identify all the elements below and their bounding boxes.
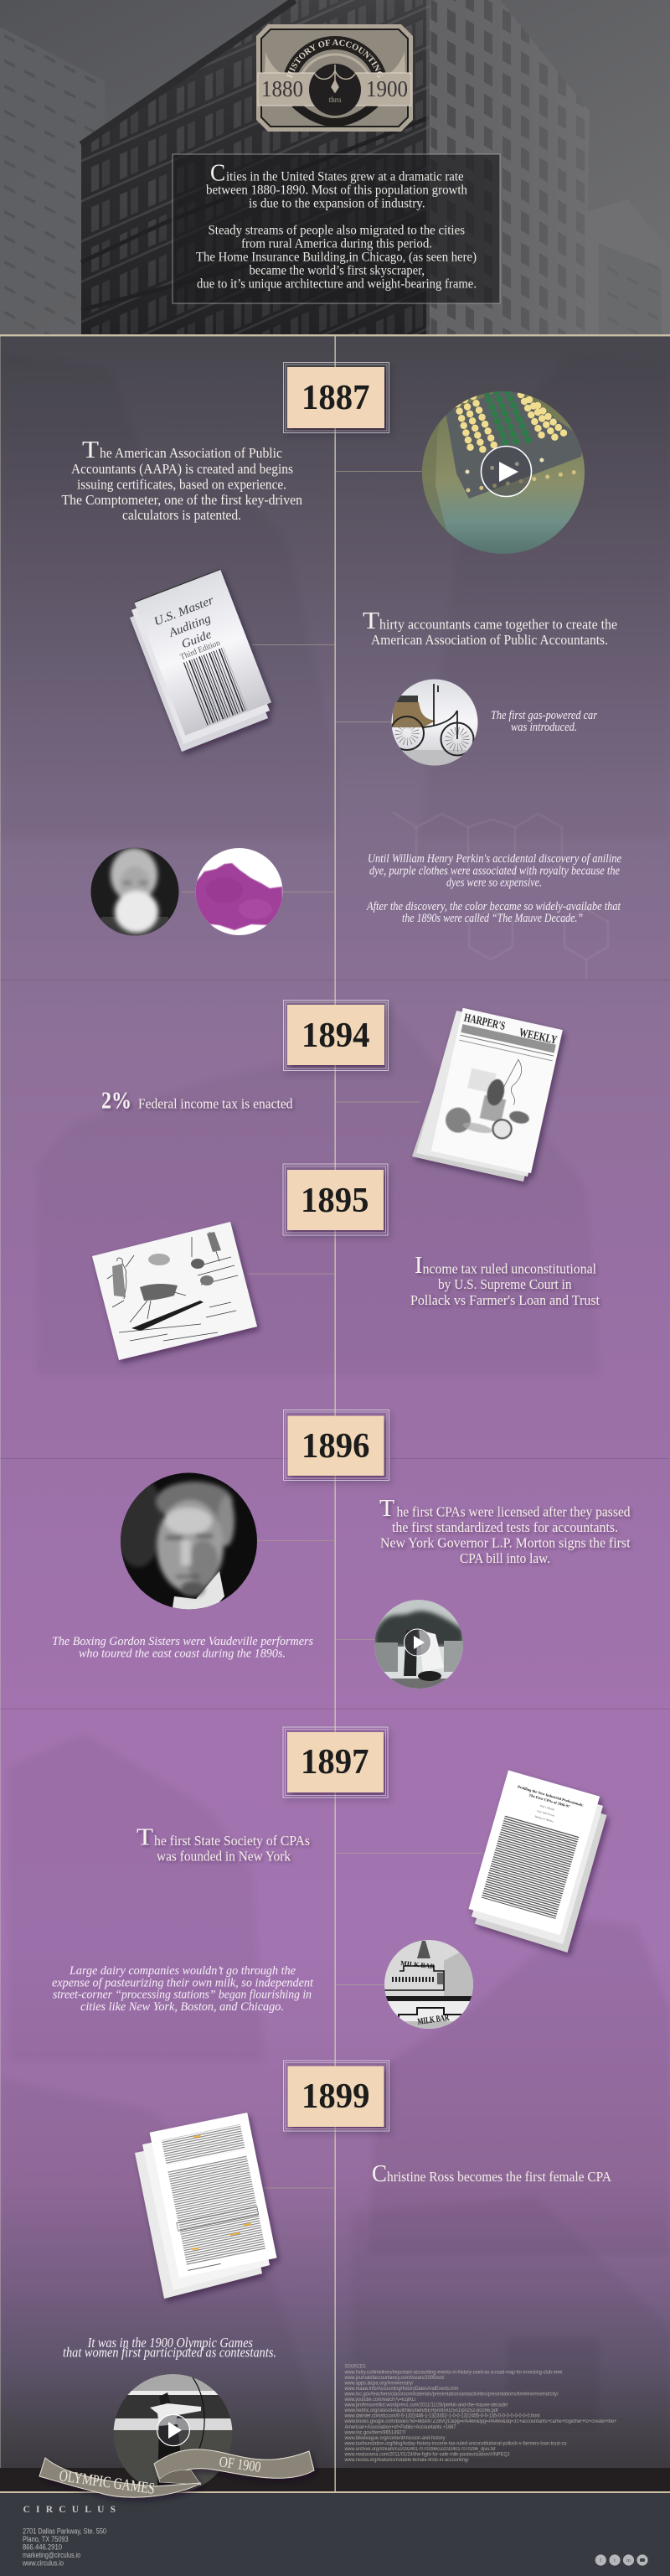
- header photo: Home Insurance Building: [0, 0, 670, 335]
- caption: milk processing stations: cities like New York, Boston, and Chicago.: [80, 2000, 284, 2014]
- year marker 1887: [283, 362, 389, 432]
- play button: [404, 1629, 430, 1656]
- text: AAPA created: The Comptometer, one of the first key-driven: [62, 492, 302, 508]
- year marker 1899: 1899: [302, 2077, 370, 2116]
- text: AAPA created: [62, 437, 302, 523]
- intro text box: C: [210, 159, 225, 186]
- image: CPA article pages: Paul J. Miranti: [539, 1804, 555, 1811]
- year marker 1897: 1897: [301, 1743, 368, 1782]
- year marker 1897: [283, 1727, 388, 1798]
- image: Harper's Weekly: [412, 1008, 563, 1182]
- image: milk bar: MILK BAR: [417, 2013, 451, 2027]
- year marker 1896: [283, 1410, 389, 1480]
- text: Perkin and mauve decade: Until William Henry Perkin's accidental discovery of aniline: [368, 852, 621, 866]
- year marker 1894: 1894: [302, 1016, 370, 1055]
- text: income tax ruled unconstitutional: I: [415, 1252, 422, 1279]
- sources list: www.youtube.com/watch?v=lcqtKLI: [344, 2398, 416, 2403]
- image: first car: [390, 679, 478, 767]
- text: first State Society of CPAs: [137, 1824, 310, 1864]
- text: 2% federal income tax: [101, 1088, 293, 1115]
- intro text box: Steady streams of people also migrated to the cities: [208, 223, 465, 237]
- text: 2% federal income tax: Federal income tax is enacted: [138, 1096, 293, 1112]
- intro text box: became the world’s first skyscraper,: [250, 263, 425, 277]
- sources list: www.taxfoundation.org/blog/today-history-income-tax-ruled-unconstitutional-pollock-v-farmers-loan-trust-co: [344, 2441, 567, 2446]
- text: first State Society of CPAs: was founded in New York: [157, 1849, 291, 1864]
- header panel: [0, 0, 670, 334]
- text: Perkin and mauve decade: After the discovery, the color became so widely-availabe that: [366, 900, 621, 913]
- timeline spine: [334, 336, 336, 2491]
- intro text box: The Home Insurance Building,in Chicago, (as seen here): [196, 250, 477, 264]
- contact details: www.circulus.io: [22, 2559, 64, 2568]
- caption: milk processing stations: street-corner “processing stations” began flourishing in: [53, 1989, 312, 2002]
- sources list: American+Association+of+Public+Accountants.+1887: [345, 2425, 456, 2430]
- faint aniline molecule: [393, 812, 608, 980]
- caption: milk processing stations: [52, 1964, 314, 2014]
- sources list: www.apps.aicpa.org/Anniversary/: [344, 2381, 414, 2386]
- intro text box: is due to the expansion of industry.: [249, 197, 425, 211]
- year marker 1887: 1887: [302, 379, 370, 417]
- caption: Boxing Gordon Sisters: who toured the east coast during the 1890s.: [79, 1648, 286, 1661]
- image: milk bar: [384, 1940, 474, 2031]
- sources list: www.bikeleague.org/content/mission-and-history: [344, 2436, 446, 2441]
- image: Harper's Weekly: HARPER'S: [462, 1011, 507, 1033]
- text: 2% federal income tax: 2%: [101, 1088, 131, 1115]
- contact details: [22, 2527, 106, 2568]
- social icons: [595, 2554, 648, 2566]
- image: U.S. Master Auditing Guide: Guide: [180, 628, 214, 651]
- sources list: www.loc.gov/item/96514927/: [344, 2430, 406, 2435]
- text: first State Society of CPAs: T: [137, 1824, 153, 1851]
- text: first CPAs licensed: New York Governor L.P. Morton signs the first: [380, 1534, 631, 1550]
- intro text box: due to it’s unique architecture and weight-bearing frame.: [197, 277, 477, 291]
- text: AAPA created: Accountants (AAPA) is created and begins: [71, 461, 293, 477]
- image: CPA article pages: Gary John Previts: [537, 1809, 555, 1818]
- year marker 1895: [283, 1164, 388, 1235]
- caption: first gas-powered car: was introduced.: [511, 721, 577, 734]
- sources list: [344, 2365, 617, 2463]
- sources list: www.daimler.com/dccom/0-5-1322446-1-1323352-1-0-0-1322455-0-0-135-0-0-0-0-0-0-0-0.html: [344, 2414, 539, 2419]
- image: U.S. Master Auditing Guide: Auditing: [167, 612, 213, 640]
- image: CPA article pages: Barbara D. Merino: [534, 1814, 554, 1823]
- text: Perkin and mauve decade: dye, purple clothes were associated with royalty because the: [369, 864, 620, 877]
- badge ornament: [315, 65, 355, 92]
- text: AAPA created: issuing certificates, based on experience.: [77, 476, 286, 493]
- banner: Olympic Games of 1900: [39, 2449, 314, 2498]
- sources list: SOURCES:: [345, 2365, 367, 2370]
- text: Christine Ross: hristine Ross becomes the first female CPA: [387, 2169, 612, 2185]
- text: Perkin and mauve decade: dyes were so expensive.: [446, 877, 542, 890]
- footer logo: CIRCULUS: CIRCULUS: [23, 2505, 116, 2515]
- connector lines: [182, 471, 484, 2188]
- social icons: in: [626, 2558, 631, 2563]
- year marker 1895: 1895: [301, 1182, 368, 1220]
- title badge: [256, 24, 413, 132]
- sources list: www.journalofaccountancy.com/issues/2005/oct/: [344, 2376, 445, 2381]
- caption: milk processing stations: expense of pasteurizing their own milk, so independent: [52, 1976, 314, 1989]
- contact details: Plano, TX 75093: [23, 2535, 69, 2543]
- sources list: www.hebhc.org/sites/default/files/beh/BEHprint/v025n1/p0252-p0266.pdf: [344, 2408, 498, 2413]
- caption: Boxing Gordon Sisters: The Boxing Gordon Sisters were Vaudeville performers: [52, 1635, 313, 1648]
- text: thirty accountants: [363, 608, 617, 648]
- sources list: www.hstry.co/timelines/important-accounting-events-in-history-used-as-a-road-map-for-investing-club-mee: [344, 2370, 563, 2375]
- caption: women in 1900 Olympics: It was in the 1900 Olympic Games: [87, 2335, 253, 2351]
- image: U.S. Master Auditing Guide: Third Edition: [179, 639, 221, 662]
- text: thirty accountants: American Association of Public Accountants.: [371, 632, 608, 648]
- text: first CPAs licensed: the first standardized tests for accountants.: [392, 1519, 618, 1535]
- text: AAPA created: T: [82, 437, 99, 463]
- sources list: www.books.google.com/books?id=MdAtlTZ28VQC&pg=PA46#&lpg=PA46#&dq=31+accountants+came+together+to+create+the+: [344, 2419, 617, 2424]
- image: U.S. Master Auditing Guide: U.S. Master: [152, 593, 216, 628]
- text: first CPAs licensed: [379, 1495, 631, 1566]
- caption: milk processing stations: Large dairy companies wouldn’t go through the: [69, 1964, 296, 1978]
- text: first CPAs licensed: CPA bill into law.: [460, 1550, 550, 1566]
- text: Christine Ross: C: [372, 2160, 387, 2187]
- intro text box: ities in the United States grew at a dramatic rate: [226, 170, 464, 184]
- top rule: [0, 334, 670, 336]
- caption: women in 1900 Olympics: [63, 2335, 276, 2361]
- sources list: www.professorelliot.wordpress.com/2011/11/26/perkin-and-the-mauve-decade/: [344, 2403, 508, 2408]
- text: AAPA created: he American Association of Public: [100, 445, 282, 461]
- sources list: www.archive.org/stream/cu31924017070296/cu31924017070296_djvu.txt: [344, 2447, 496, 2452]
- portrait: William Henry Perkin: [90, 847, 179, 936]
- social icons: t: [614, 2558, 616, 2563]
- video circle: Boxing Gordon Sisters: [374, 1600, 463, 1689]
- text: Perkin and mauve decade: the 1890s were called “The Mauve Decade.”: [402, 912, 583, 925]
- footer panel: [0, 2493, 670, 2576]
- text: first State Society of CPAs: he first State Society of CPAs: [154, 1833, 310, 1849]
- play button: [157, 2414, 189, 2446]
- social icons: f: [600, 2558, 601, 2563]
- banner: Olympic Games of 1900: OLYMPIC GAMES: [58, 2467, 156, 2498]
- thru: thru: [329, 96, 342, 104]
- end year: 1900: [366, 76, 408, 101]
- caption: Boxing Gordon Sisters: [52, 1635, 313, 1661]
- image: CPA article pages: Profiling the New Industrial Professionals:: [517, 1784, 585, 1808]
- banner: Olympic Games of 1900: OF 1900: [218, 2453, 262, 2475]
- caption: first gas-powered car: The first gas-powered car: [491, 709, 597, 722]
- video circle: women's archery 1900: [113, 2374, 233, 2493]
- intro text box: from rural America during this period.: [241, 236, 432, 251]
- year marker 1894: [283, 1001, 389, 1071]
- text: thirty accountants: T: [363, 608, 379, 634]
- image: milk bar: MILK BAR: [400, 1959, 436, 1970]
- image: mauve dye powder: [195, 847, 284, 936]
- caption: women in 1900 Olympics: that women first participated as contestants.: [63, 2345, 276, 2361]
- text: income tax ruled unconstitutional: [410, 1252, 600, 1308]
- image: income tax cartoon: [92, 1222, 257, 1360]
- arc title: HISTORY OF ACCOUNTING: [286, 39, 384, 79]
- text: Perkin and mauve decade: [366, 852, 621, 925]
- contact details: 2701 Dallas Parkway, Ste. 550: [23, 2527, 106, 2536]
- text: income tax ruled unconstitutional: by U.S. Supreme Court in: [438, 1276, 572, 1292]
- year marker 1896: 1896: [302, 1427, 370, 1466]
- video circle: comptometer: [422, 387, 585, 554]
- contact details: marketing@circulus.io: [23, 2551, 80, 2559]
- image: Harper's Weekly: WEEKLY: [518, 1027, 558, 1047]
- dark base band: [0, 2468, 670, 2491]
- text: AAPA created: calculators is patented.: [122, 507, 241, 523]
- text: income tax ruled unconstitutional: ncome tax ruled unconstitutional: [423, 1261, 596, 1277]
- caption: first gas-powered car: [491, 709, 597, 734]
- intro text box: [173, 154, 500, 303]
- text: income tax ruled unconstitutional: Pollack vs Farmer's Loan and Trust: [410, 1292, 600, 1308]
- image: Christine Ross document pages: [135, 2113, 276, 2299]
- sources list: www.nesba.org/features/notable-female-firsts-in-accounting/: [344, 2458, 469, 2463]
- year marker 1899: [283, 2061, 389, 2131]
- portrait: Governor L.P. Morton: [113, 1472, 258, 1613]
- image: U.S. Master Auditing Guide: [130, 569, 271, 752]
- start year: 1880: [261, 76, 303, 101]
- text: first CPAs licensed: he first CPAs were licensed after they passed: [397, 1503, 631, 1520]
- sources list: www.loc.gov/teachers/classroommaterials/presentationsandactivities/presentations/timeline/riseind/city/: [344, 2392, 559, 2397]
- text: thirty accountants: hirty accountants came together to create the: [379, 617, 617, 632]
- contact details: 866.446.2910: [23, 2543, 62, 2552]
- image: CPA article pages: [469, 1770, 606, 1953]
- sources list: www.neatorama.com/2011/01/24/the-fight-for-safe-milk-pasteurization/#!NPEQJ: [344, 2452, 509, 2457]
- bottom rule: [0, 2491, 670, 2493]
- text: Christine Ross: [372, 2160, 612, 2187]
- text: first CPAs licensed: T: [379, 1495, 394, 1522]
- image: CPA article pages: The First CPAs of 1896-97: [528, 1792, 571, 1808]
- intro text box: between 1880-1890. Most of this population growth: [206, 184, 467, 198]
- play button: [481, 446, 531, 496]
- sources list: www.maaw.info/AccountingHistoryDatesAndEvents.htm: [344, 2387, 459, 2392]
